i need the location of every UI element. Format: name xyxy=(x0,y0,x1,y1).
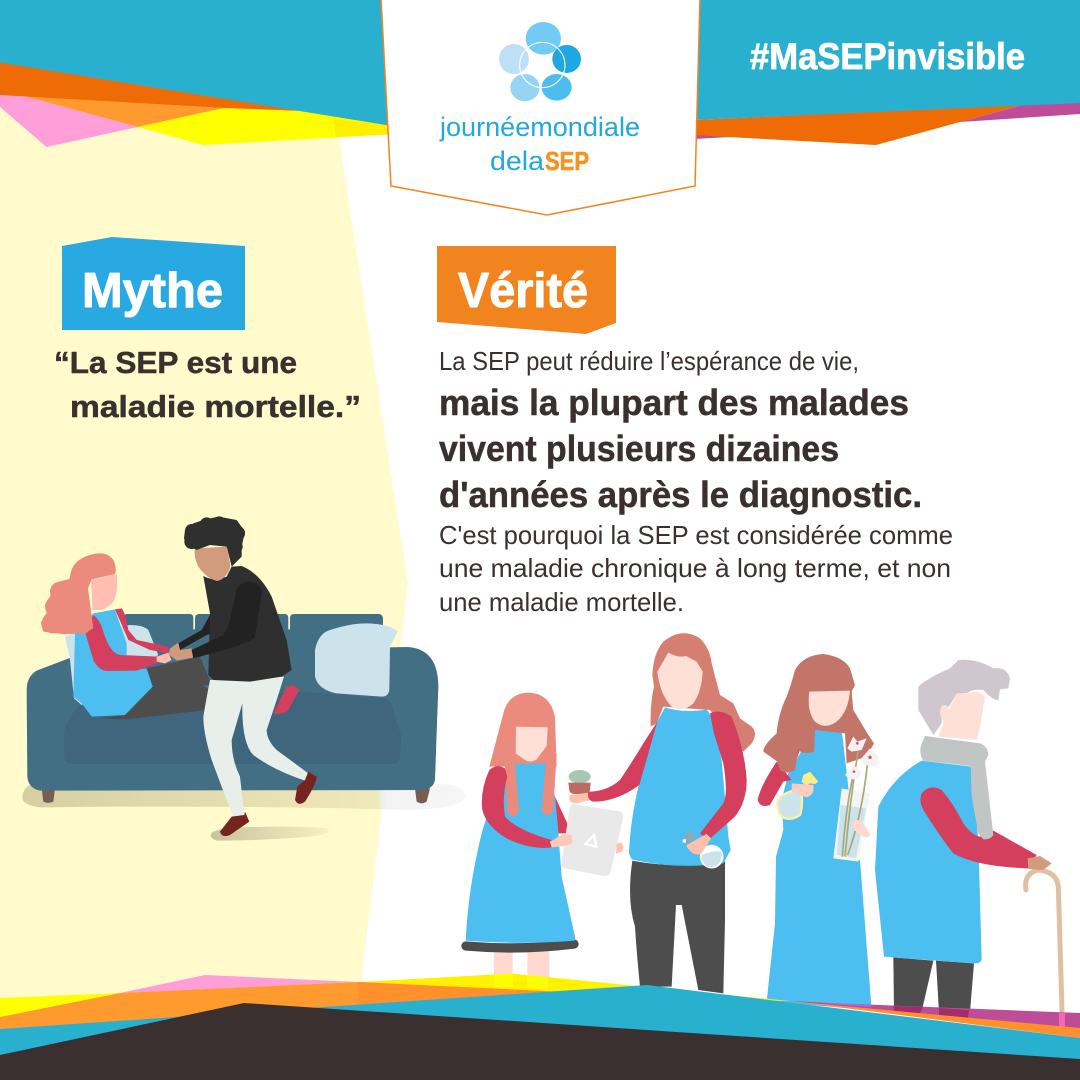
truth text: une maladie chronique à long terme, et non xyxy=(439,553,951,583)
cactus in pot xyxy=(568,770,591,803)
truth text: une maladie mortelle. xyxy=(439,587,684,617)
illustration: couple on sofa xyxy=(22,516,466,841)
woman with flask xyxy=(588,633,755,993)
girl xyxy=(466,693,623,980)
top right ribbons xyxy=(694,0,1080,145)
truth text: mais la plupart des malades xyxy=(439,382,909,423)
top left ribbons xyxy=(0,0,389,147)
label: Mythe xyxy=(62,237,245,330)
truth text: C'est pourquoi la SEP est considérée comme xyxy=(439,520,953,550)
hashtag: #MaSEPinvisible xyxy=(750,36,1025,77)
old man with cane xyxy=(875,660,1063,1033)
myth quote xyxy=(54,345,361,424)
icon: five petals logo xyxy=(499,22,581,101)
woman on sofa xyxy=(41,553,212,719)
sofa xyxy=(27,614,438,803)
small pillow behind woman xyxy=(65,625,158,705)
label: Vérité: Vérité xyxy=(458,264,588,318)
myth quote: maladie mortelle.” xyxy=(70,389,361,424)
illustration: woman with flowers and old man xyxy=(758,654,1063,1033)
logo: journée mondiale de la SEP xyxy=(439,22,640,176)
myth quote: “La SEP est une xyxy=(54,345,297,380)
logo text line 2: dela xyxy=(490,146,545,176)
truth text: d'années après le diagnostic. xyxy=(439,474,922,515)
foot shadow xyxy=(211,827,329,841)
red sock xyxy=(273,685,299,714)
illustration: girl and woman xyxy=(466,633,755,993)
sofa shadow xyxy=(22,784,466,810)
label: Mythe: Mythe xyxy=(82,264,223,318)
label: Vérité xyxy=(437,246,616,334)
logo text line 1: journéemondiale xyxy=(439,112,640,142)
panel: logo shield xyxy=(381,0,700,215)
truth text: La SEP peut réduire l’espérance de vie, xyxy=(439,346,859,376)
woman with flowers xyxy=(758,654,878,1010)
truth text: vivent plusieurs dizaines xyxy=(439,428,839,469)
panel: mythe cream background xyxy=(0,100,408,1010)
bottom ribbons xyxy=(0,974,1080,1080)
man standing xyxy=(168,516,317,836)
logo text SEP: SEP xyxy=(545,146,589,176)
truth text xyxy=(439,346,953,617)
